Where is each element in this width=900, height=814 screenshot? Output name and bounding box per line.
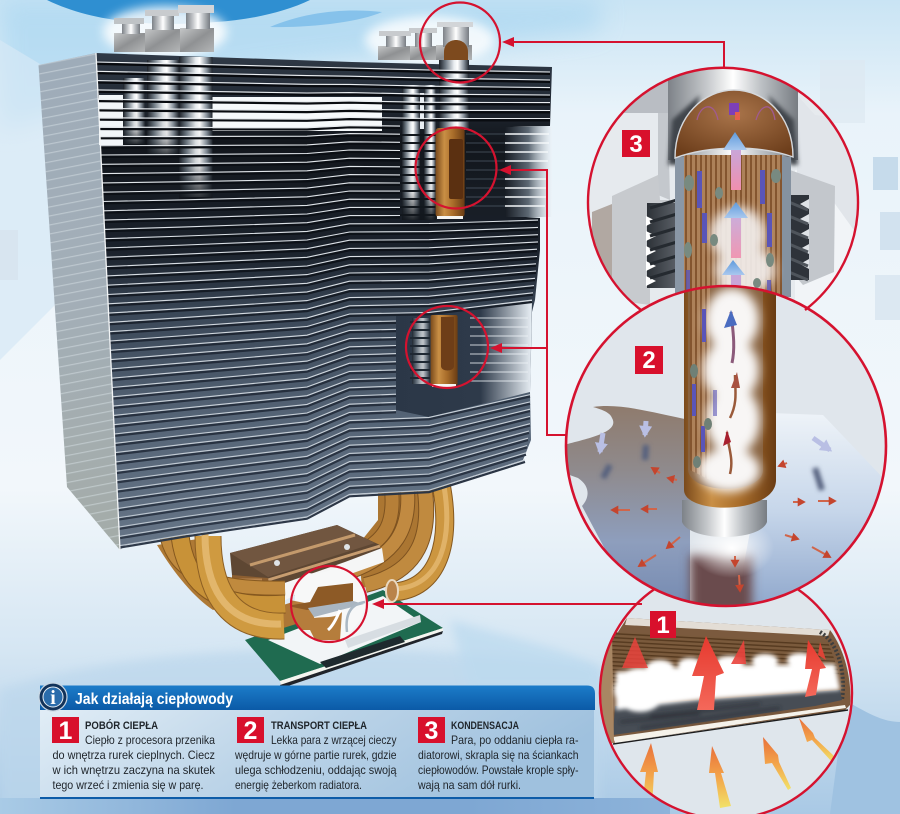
step 2: 2: [244, 717, 257, 745]
right wall: [797, 170, 857, 230]
fin edges: [96, 62, 550, 546]
step 2: [234, 717, 397, 792]
heat pipes through fins, right group: [400, 60, 469, 220]
copper base block: [230, 525, 384, 606]
info icon: [39, 683, 67, 711]
lower lip: [613, 705, 846, 743]
step 3: ciepłowodów. Powstałe krople spły-: [418, 763, 579, 777]
ring: base pipe: [291, 566, 367, 642]
left upper grey wall: [624, 81, 668, 113]
top pipe caps, right group: [378, 22, 473, 60]
brown reflective patch and left plate: [564, 406, 690, 615]
lower notch shelf: [396, 300, 532, 417]
collar shadows beside dome: [668, 95, 798, 165]
cut-away copper pipe, upper: [436, 128, 465, 219]
cut-away copper pipe, lower: [431, 315, 458, 387]
white front edge: [96, 53, 120, 550]
cross pipe over base: [272, 592, 362, 620]
step 2: wędruje w górne partie rurek, gdzie: [234, 748, 397, 762]
arrow to upper pipe: [499, 165, 566, 435]
ring: circle 3: [588, 68, 858, 310]
panel bottom rule: [40, 797, 594, 799]
front face: [96, 53, 552, 550]
step 3: wają na sam dół rurki.: [417, 778, 521, 792]
step 1: tego wrzeć i zmienia się w parę.: [52, 778, 204, 792]
left clamp block: [612, 175, 672, 305]
lower notch fading fins: [470, 318, 528, 381]
lower notch left pipe: [410, 318, 430, 384]
droplets: [690, 364, 712, 468]
number badge 1: [650, 611, 676, 639]
right threaded fins: [791, 195, 809, 282]
ring: circle 1: [600, 589, 852, 814]
upper right fading fins: [466, 127, 552, 217]
top pipe caps, left group: [114, 5, 214, 52]
silver collar: [682, 500, 767, 537]
left wall: [658, 113, 670, 200]
number badge 2: [635, 346, 663, 374]
step 1: POBÓR CIEPŁA: [85, 719, 158, 732]
info icon: i: [50, 687, 56, 709]
step 1: Ciepło z procesora przenika: [85, 733, 215, 747]
detail circle 1: evaporation: [601, 591, 851, 814]
left end of tube: [601, 641, 614, 743]
number badge 3: 3: [629, 131, 643, 158]
droplets: [684, 169, 781, 301]
arrow to lower pipe: [490, 343, 547, 353]
step 1: w ich wnętrzu zaczyna na skutek: [52, 763, 216, 777]
boiling liquid layer: [613, 690, 842, 735]
left side face: [38, 53, 120, 550]
inner ribs: [610, 632, 840, 690]
glow and base reflection: [684, 530, 770, 605]
heat pipes through fins, left group: [123, 57, 212, 200]
front left heat pipes: [157, 532, 285, 626]
condensation arcs: [697, 107, 775, 120]
condensate arrows on plate: [600, 421, 830, 452]
panel title: Jak działają ciepłowody: [75, 691, 233, 708]
number badge 2: 2: [642, 347, 656, 374]
info panel: [39, 683, 595, 799]
metal collar: [668, 60, 798, 160]
circle 1 cut-away in base pipe: [292, 573, 366, 640]
step 2: ulega schłodzeniu, oddając swoją: [235, 763, 397, 777]
falling liquid bars: [686, 170, 772, 294]
step 3: 3: [425, 717, 438, 745]
detail circle 3: condensation: [590, 69, 857, 308]
ring: upper pipe: [416, 128, 496, 208]
toothed right end: [820, 632, 843, 700]
vapour arrows: [723, 310, 740, 474]
ring: circle 2: [566, 286, 886, 606]
tube walls: [675, 157, 684, 297]
step 3: diatorowi, skrapla się na ściankach: [418, 748, 578, 762]
panel body: [40, 710, 594, 797]
red rising arrows: [622, 636, 826, 710]
step 3: [417, 717, 579, 792]
rising vapour arrows: [722, 132, 748, 293]
arrow to base pipe: [372, 599, 642, 609]
step 2: TRANSPORT CIEPŁA: [271, 720, 367, 732]
number badge 1: 1: [656, 612, 670, 639]
step 2: energię żeberkom radiatora.: [235, 778, 362, 792]
CPU processor: [245, 590, 443, 688]
top rim: [625, 618, 830, 636]
step 1: do wnętrza rurek cieplnych. Ciecz: [52, 748, 215, 762]
dome: [675, 90, 793, 158]
heat arrows entering pipe: [640, 718, 834, 808]
copper tube: [684, 280, 776, 508]
detail circle 2: vapour transport: [567, 287, 884, 605]
top droplet mark: [729, 103, 739, 115]
arrow shadows: [603, 445, 822, 490]
step 1: 1: [59, 717, 73, 745]
falling liquid bars: [692, 309, 717, 452]
ring: lower pipe: [406, 306, 488, 388]
fin edge shadows: [96, 64, 550, 548]
right lower background: [795, 170, 854, 306]
number badge 3: [622, 130, 650, 158]
steam: [704, 200, 782, 291]
see-through gaps: [99, 93, 424, 145]
front right heat pipe with open end: [386, 481, 447, 602]
heatsink fin stack: [38, 53, 552, 550]
back copper heat pipes on the right: [350, 484, 430, 588]
ring: heatsink top: [420, 2, 500, 82]
tube body: [600, 618, 850, 743]
step 2: Lekka para z wrzącej cieczy: [271, 733, 396, 747]
arrow to heatsink top: [502, 37, 724, 68]
steel plate, right: [746, 414, 882, 603]
step 3: Para, po oddaniu ciepła ra-: [451, 733, 579, 747]
steam: [614, 653, 840, 712]
step 1: [52, 717, 216, 792]
tube interior ribs: [684, 155, 782, 295]
step 3: KONDENSACJA: [451, 720, 519, 732]
heat flow arrows on plate: [612, 463, 835, 591]
left threaded fins: [646, 200, 677, 288]
steam column: [698, 288, 760, 492]
header bar: [40, 686, 595, 710]
tube interior: [688, 280, 763, 489]
